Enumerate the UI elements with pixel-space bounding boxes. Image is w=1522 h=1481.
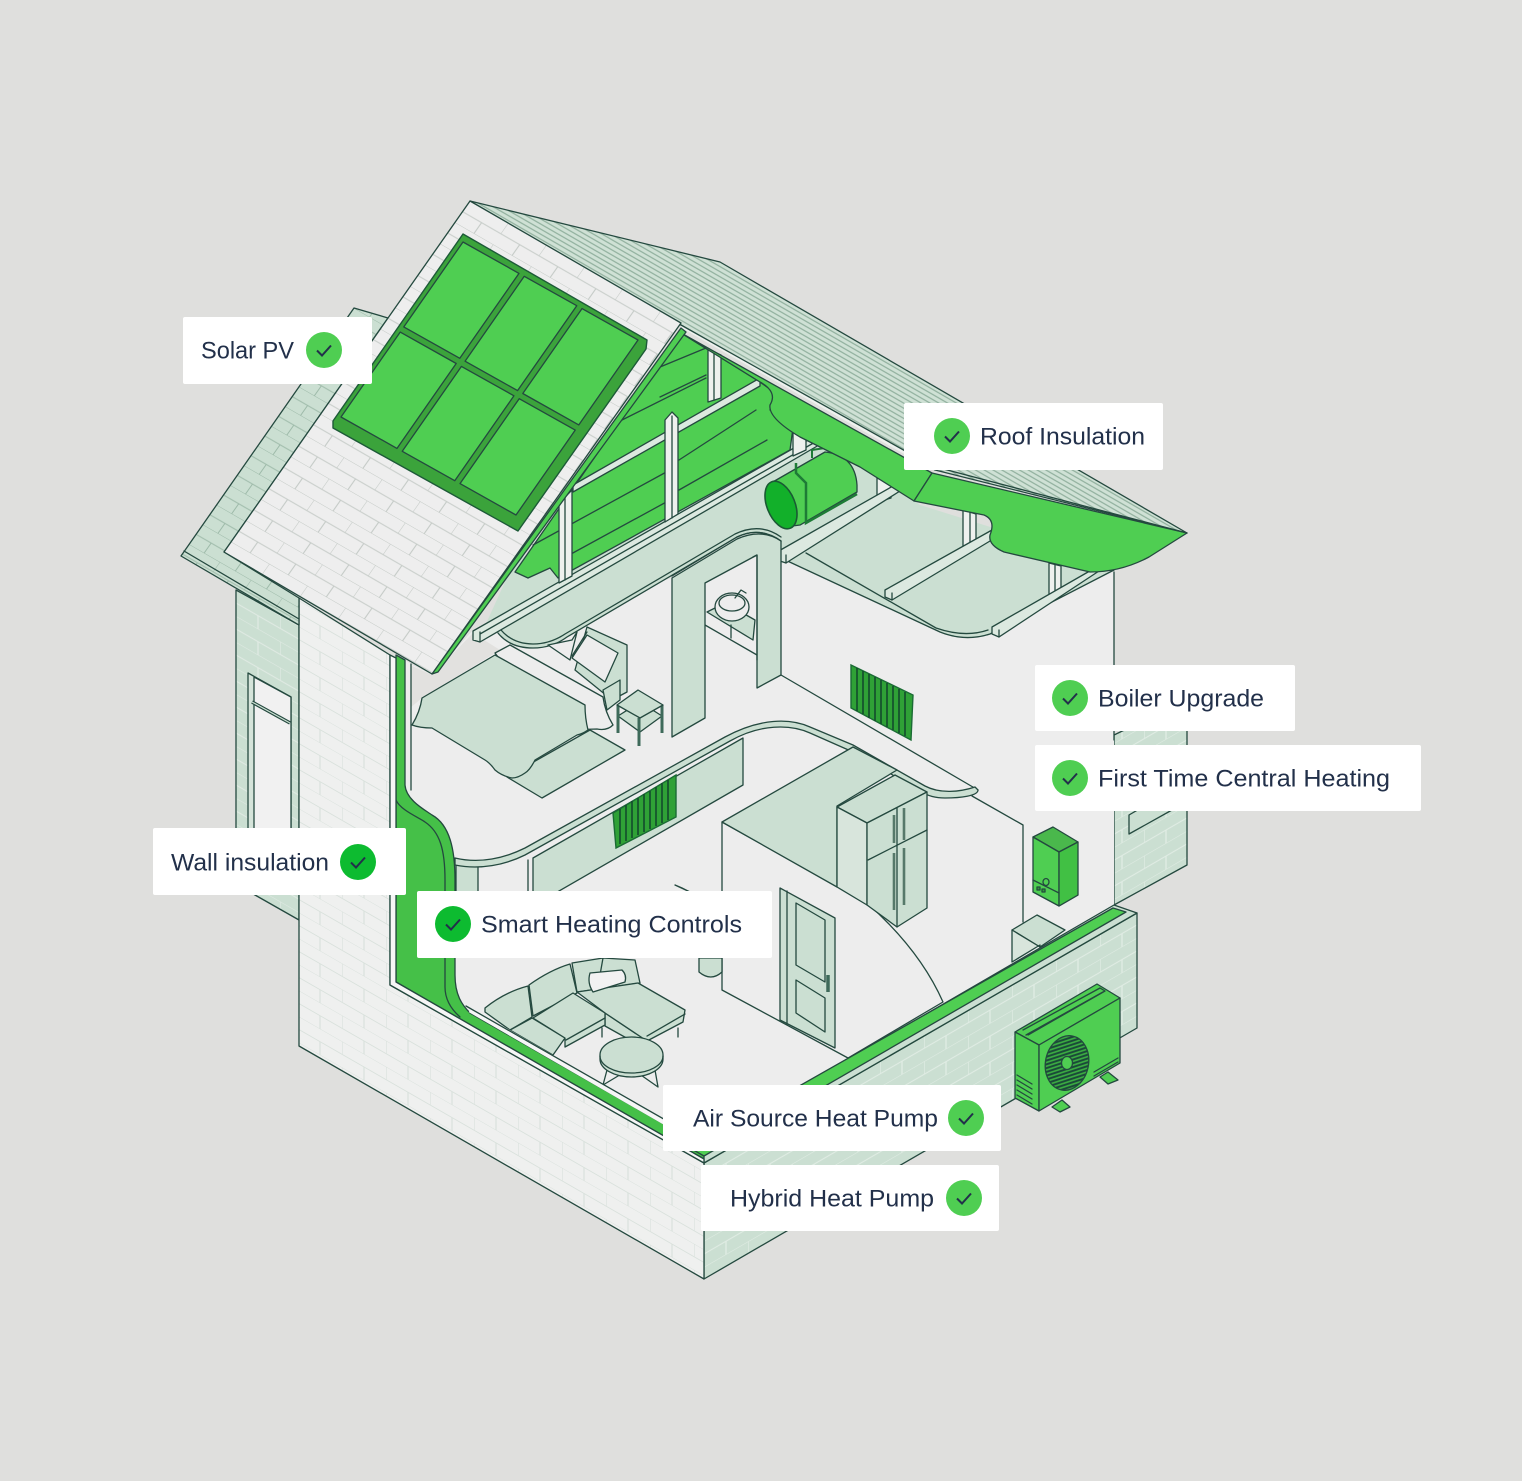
inner white reveal [390, 655, 704, 1163]
panel frame [333, 234, 647, 531]
label: Boiler Upgrade: Boiler Upgrade [1098, 686, 1264, 712]
timber beams [473, 350, 1099, 642]
plant tip [675, 885, 690, 892]
label: First Time Central Heating [1035, 745, 1421, 811]
boiler top [1033, 827, 1078, 852]
wall top cap [704, 905, 1137, 1163]
label: Boiler Upgrade [1035, 665, 1295, 731]
partition with columns [672, 534, 781, 737]
label: Wall insulation [153, 828, 406, 895]
panel cell 4 [341, 332, 456, 448]
far right gable wall [1114, 700, 1187, 905]
right interior edge [1113, 572, 1115, 740]
kitchen top [722, 747, 897, 887]
label: First Time Central Heating: First Time Central Heating [1098, 766, 1390, 792]
kitchen wall [722, 822, 943, 1058]
slab edge [455, 721, 978, 867]
utility cabinet [1012, 915, 1065, 962]
upper radiator [851, 665, 913, 740]
label: Air Source Heat Pump: Air Source Heat Pump [693, 1106, 938, 1132]
chaise side [605, 1013, 647, 1041]
fridge [837, 775, 927, 927]
middle back cushion [529, 964, 577, 1016]
door [780, 888, 835, 1048]
solar panel array [333, 234, 647, 531]
coffee table [600, 1037, 663, 1087]
upper floor slab [455, 721, 978, 906]
kitchen [722, 747, 943, 1058]
insulated rafters [515, 333, 793, 578]
label: Hybrid Heat Pump: Hybrid Heat Pump [730, 1186, 934, 1212]
near pillow [572, 635, 618, 682]
loft cylinder [759, 448, 857, 533]
far right window [1129, 790, 1172, 834]
panel cell 5 [402, 366, 514, 481]
upper beam [573, 378, 760, 492]
seat two [533, 993, 605, 1047]
label: Wall insulation: Wall insulation [171, 850, 329, 876]
house interior [392, 550, 1114, 1160]
unit side [1015, 1032, 1039, 1111]
unit feet [1052, 1072, 1118, 1112]
bin [699, 958, 722, 977]
rug [507, 730, 625, 798]
label: Smart Heating Controls [417, 891, 772, 958]
far pillow [548, 632, 577, 660]
rear roof slope [470, 201, 1187, 533]
bathroom doorway [705, 555, 757, 660]
far left gable wall [236, 590, 299, 920]
bedside table [617, 690, 663, 746]
attic ceiling [484, 430, 1114, 648]
label: Roof Insulation: Roof Insulation [980, 424, 1145, 450]
eaves insulation, second section [914, 473, 1187, 572]
rafter posts [559, 490, 572, 583]
label: Air Source Heat Pump [663, 1085, 1001, 1151]
roof insulation [681, 325, 1187, 572]
bed blanket [412, 655, 588, 778]
air source heat pump [1015, 984, 1120, 1112]
panel cell 3 [523, 309, 638, 425]
label: Smart Heating Controls: Smart Heating Controls [481, 912, 742, 938]
bedroom [412, 627, 663, 798]
fan grille [1040, 1032, 1094, 1094]
label: Solar PV: Solar PV [201, 338, 294, 364]
roof left eave [181, 308, 388, 625]
right interior wall [972, 796, 1023, 922]
panel cell 2 [465, 276, 577, 391]
main beam [473, 436, 819, 642]
sheet [495, 645, 613, 730]
seat one [510, 1018, 565, 1055]
chaise [577, 983, 685, 1041]
bathroom [672, 532, 781, 737]
roof insulation edge strip [432, 328, 686, 674]
boiler [1033, 827, 1078, 906]
gap beside roof [410, 633, 500, 708]
cushion [589, 970, 626, 992]
ridge post [708, 350, 721, 402]
label: Hybrid Heat Pump [701, 1165, 999, 1231]
eaves insulation, first section [681, 333, 932, 501]
far left doorway [248, 673, 291, 850]
label: Roof Insulation [904, 403, 1163, 470]
left back cushion [485, 986, 532, 1030]
panel cell 6 [460, 399, 575, 515]
ceiling joists [777, 486, 900, 563]
green cavity insulation [690, 908, 1126, 1156]
unit front [1039, 998, 1120, 1111]
sink [707, 590, 755, 640]
sofa [485, 958, 685, 1055]
front left wall [299, 598, 704, 1279]
back wall floor line [781, 675, 978, 790]
boiler front [1033, 837, 1059, 906]
left wall insulation [396, 655, 716, 1159]
wall under slab [533, 738, 743, 906]
ceiling outlines [498, 529, 1114, 648]
boiler side [1059, 842, 1078, 906]
front right wall [690, 905, 1137, 1279]
mattress side [603, 680, 620, 710]
unit top [1015, 984, 1120, 1045]
right back cushions [572, 958, 640, 992]
lower radiator [613, 775, 676, 848]
panel cell 1 [404, 242, 519, 358]
solar roof slope [224, 201, 681, 674]
label: Solar PV [183, 317, 372, 384]
headboard [575, 627, 627, 700]
